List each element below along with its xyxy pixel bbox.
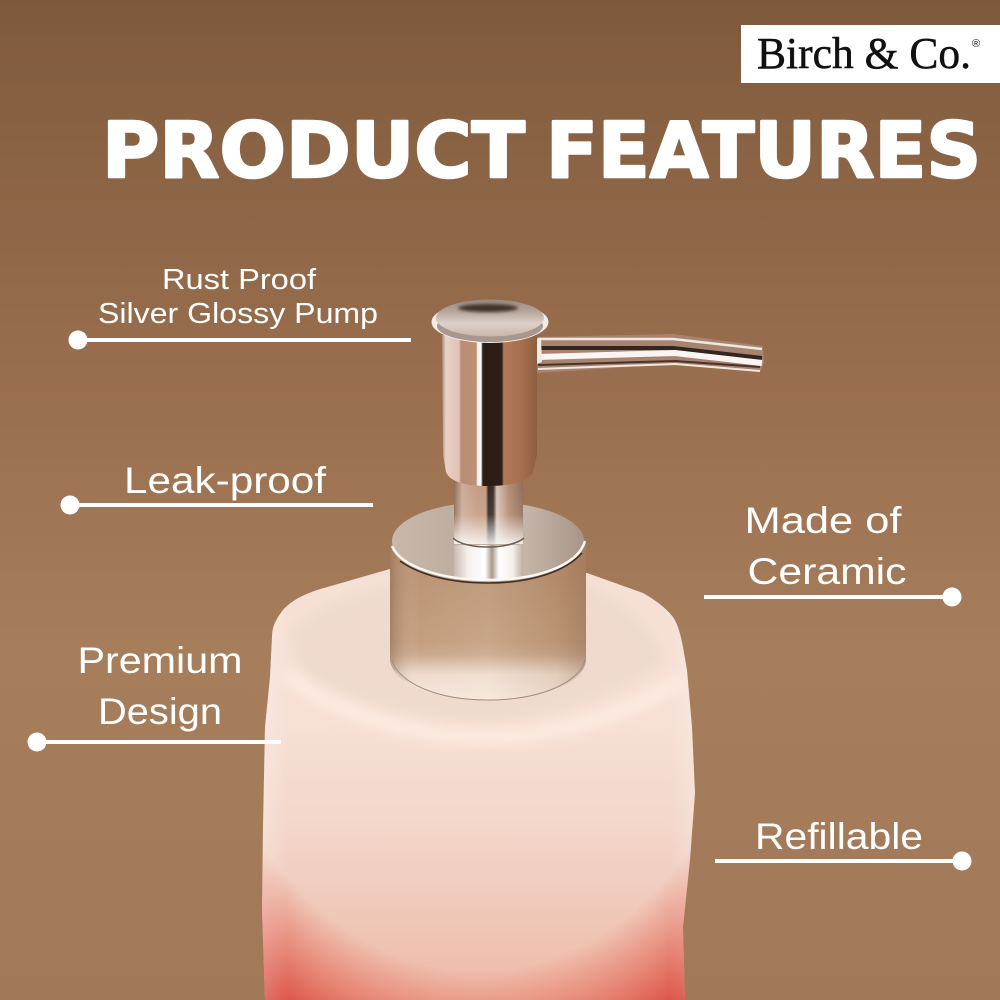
- pump column: [442, 335, 537, 486]
- callout: premium design: Premium: [78, 640, 242, 681]
- callout: rust proof pump: Rust Proof: [162, 264, 317, 296]
- title: [102, 107, 981, 196]
- callout: leak-proof: Leak-proof: [124, 460, 327, 501]
- spout: [530, 334, 764, 373]
- pump cap: [432, 300, 548, 343]
- ceramic bottle body: [255, 560, 705, 1000]
- callout: refillable: Refillable: [755, 816, 923, 857]
- brand logo box: ®: [972, 38, 980, 50]
- callout: premium design: Design: [98, 691, 222, 732]
- callout: leak-proof: [60, 460, 373, 514]
- brand logo box: Birch & Co.: [757, 29, 971, 78]
- callout: refillable: [715, 816, 972, 870]
- title: PRODUCT: [102, 107, 525, 196]
- callout: made of ceramic: Made of: [744, 500, 902, 541]
- rim: [392, 541, 585, 580]
- dispenser product photo: [255, 300, 764, 1000]
- callout: made of ceramic: [704, 500, 962, 606]
- shoulder ridge highlight: [285, 672, 680, 738]
- stem reflection in disc: [454, 545, 523, 580]
- pump stem: [453, 478, 524, 547]
- title: FEATURES: [546, 107, 981, 196]
- callout: rust proof pump: Silver Glossy Pump: [98, 298, 378, 330]
- pump collar: [390, 502, 586, 700]
- callout: made of ceramic: Ceramic: [748, 551, 906, 592]
- inner top face shading: [301, 596, 652, 714]
- callout: rust proof pump: [68, 264, 411, 350]
- callout: premium design: [28, 640, 281, 752]
